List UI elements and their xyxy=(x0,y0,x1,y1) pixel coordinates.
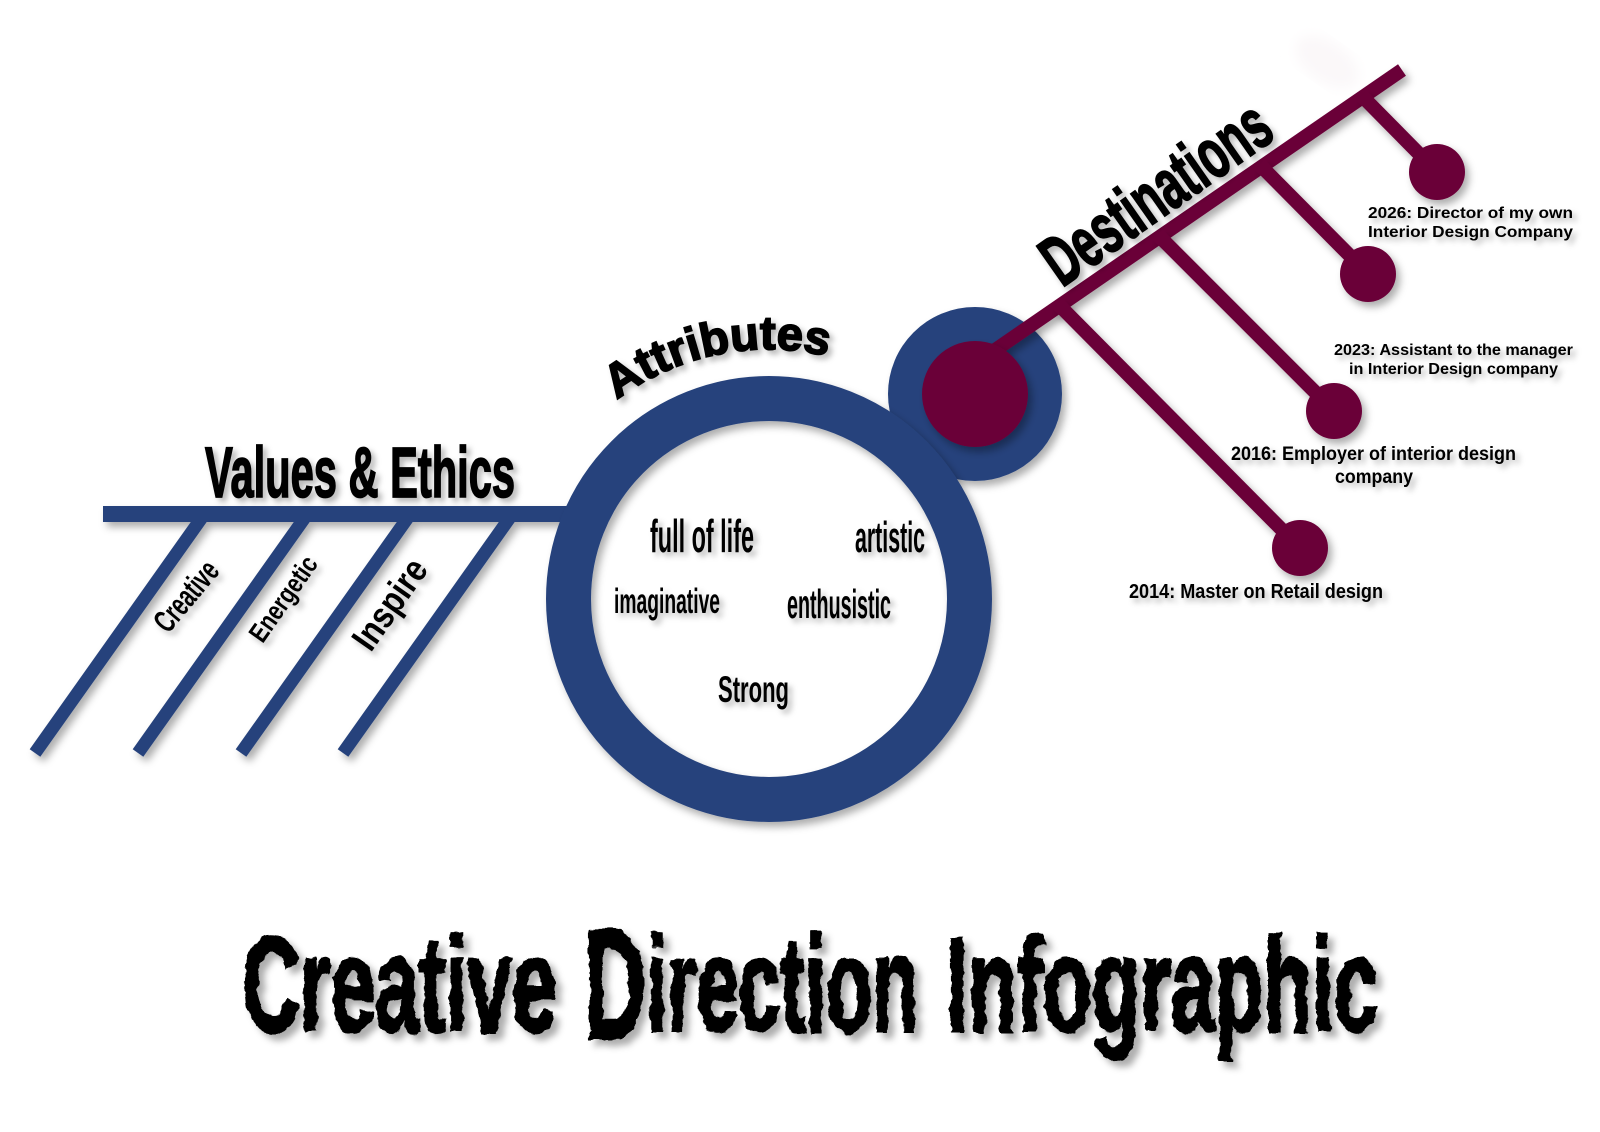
title: irection xyxy=(646,909,918,1060)
maroon hub circle xyxy=(922,341,1028,447)
note: 2016: 2016: Employer of interior design xyxy=(1231,444,1516,465)
note: 2026: 2026: Director of my own xyxy=(1368,205,1573,222)
destination branches xyxy=(1058,96,1465,576)
label: energetic: Energetic xyxy=(243,550,324,648)
title: Creative xyxy=(242,909,556,1060)
heading: attributes: Attributes xyxy=(608,318,836,406)
values and ethics spine with ribs xyxy=(35,514,580,753)
rib 3 xyxy=(241,516,409,753)
title: D xyxy=(584,898,646,1071)
attribute: full of life: full of life xyxy=(650,510,754,562)
rib 4 xyxy=(343,516,511,753)
destinations spine xyxy=(985,70,1402,357)
branch 2023 xyxy=(1260,165,1396,302)
attributes ring xyxy=(568,398,970,800)
branch 2014 xyxy=(1058,304,1328,576)
note: 2014: 2014: Master on Retail design xyxy=(1129,581,1383,603)
attribute: imaginative: imaginative xyxy=(614,582,720,621)
note: 2023 xyxy=(1334,342,1573,378)
infographic canvas: artistic xyxy=(855,513,925,562)
note: 2026 xyxy=(1368,205,1573,241)
rib 1 xyxy=(35,516,203,753)
branch 2016 xyxy=(1158,235,1362,439)
rib 2 xyxy=(138,516,306,753)
label: inspire: Inspire xyxy=(344,551,436,658)
label: creative: Creative xyxy=(146,553,226,639)
attribute: strong: Strong xyxy=(718,669,789,710)
infographic canvas: enthusistic xyxy=(787,581,891,627)
heading: destinations: Destinations xyxy=(1026,86,1287,301)
note: 2023: 2023: Assistant to the manager xyxy=(1334,342,1573,359)
note: 2026: Interior Design Company xyxy=(1368,224,1573,241)
note: 2016: company xyxy=(1335,467,1413,488)
faint smudge xyxy=(1286,25,1368,99)
branch 2026 xyxy=(1362,96,1465,200)
small navy circle xyxy=(888,307,1062,481)
note: 2016 xyxy=(1231,444,1516,488)
spine bar xyxy=(103,506,580,522)
note: 2023: in Interior Design company xyxy=(1349,361,1558,378)
heading: values and ethics: Values & Ethics xyxy=(205,434,515,513)
title xyxy=(242,898,1378,1071)
